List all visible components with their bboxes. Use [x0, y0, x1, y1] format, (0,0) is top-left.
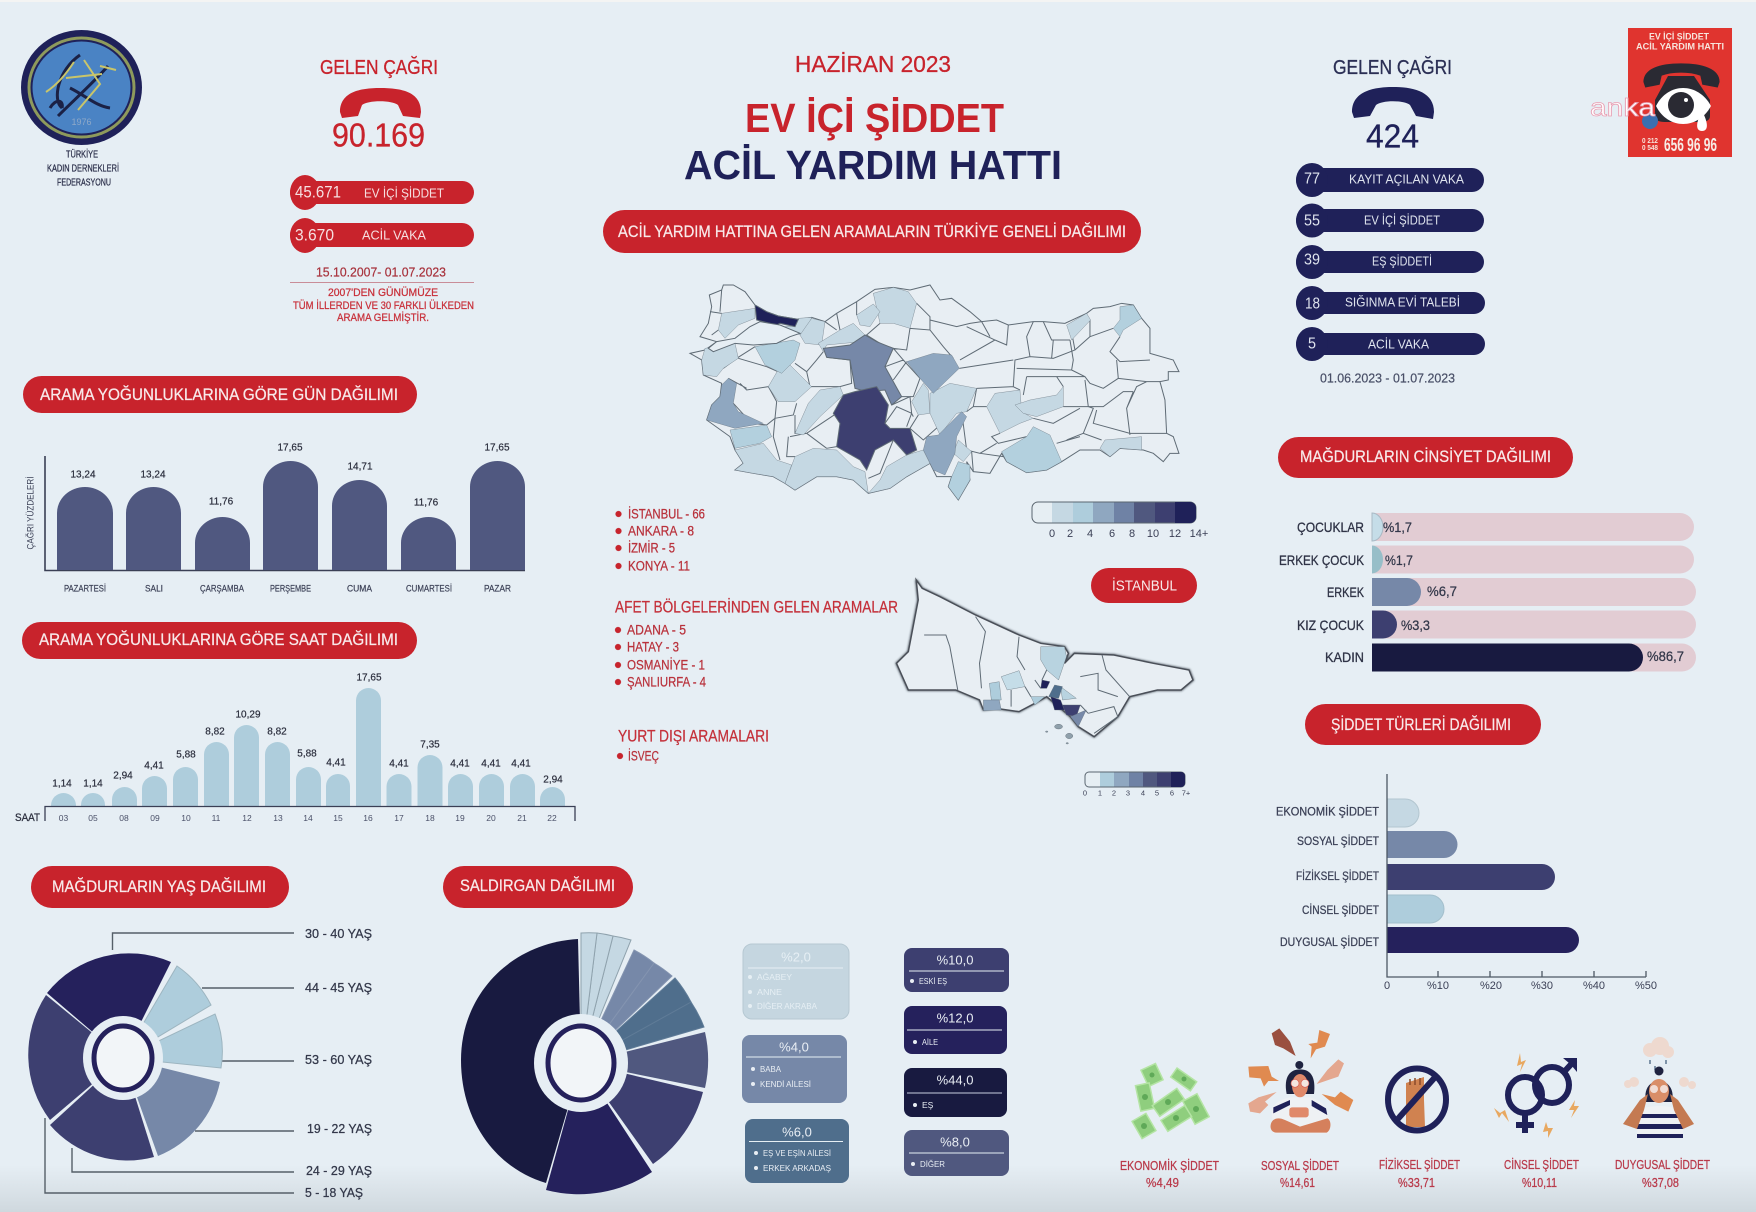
bar chart: hours: 18	[425, 813, 435, 823]
pill: sığınma evi talebi: 18	[1305, 296, 1320, 312]
pill: kayıt açılan vaka: KAYIT AÇILAN VAKA	[1349, 172, 1464, 186]
title block: EV İÇİ ŞİDDET	[745, 95, 1004, 141]
heading pill: yaş dağılımı	[31, 866, 289, 908]
map legend: Türkiye: 10	[1147, 528, 1159, 540]
pill: eş şiddeti: EŞ ŞİDDETİ	[1372, 254, 1432, 268]
bar chart: violence types	[1276, 774, 1657, 992]
bar chart: gender: %3,3	[1401, 617, 1430, 633]
bar chart: violence types: FİZİKSEL ŞİDDET	[1296, 869, 1380, 883]
bar chart: hours: 1,14	[52, 778, 72, 790]
card: %4,0: BABA	[760, 1064, 781, 1074]
bar chart: hours: 10,29	[235, 710, 261, 720]
card: %44,0: EŞ	[922, 1100, 934, 1110]
pill: acil vaka: 3.670	[295, 226, 334, 244]
icon captions row: CİNSEL ŞİDDET	[1504, 1158, 1579, 1172]
date range: 01.06.2023 - 01.07.2023	[1320, 370, 1455, 386]
bar chart: days: SALI	[145, 584, 163, 594]
card: %10,0: ESKİ EŞ	[919, 976, 947, 986]
note text: 2007'DEN GÜNÜMÜZE	[328, 287, 438, 299]
pill: ev içi şiddet: EV İÇİ ŞİDDET	[364, 186, 444, 200]
title block: ACİL YARDIM HATTI	[684, 142, 1062, 188]
choropleth map: İstanbul	[896, 580, 1193, 744]
bar chart: hours: 4,41	[389, 758, 409, 770]
bar chart: hours: 08	[119, 813, 129, 823]
heading pill: istanbul: İSTANBUL	[1112, 576, 1177, 594]
bar chart: gender	[1279, 513, 1696, 672]
bar chart: days: CUMARTESİ	[406, 584, 452, 594]
bar chart: gender: ERKEK	[1327, 584, 1365, 600]
bar chart: hours: 15	[333, 813, 343, 823]
title block	[684, 51, 1062, 188]
pill: kayıt açılan vaka: 77	[1304, 170, 1320, 188]
bar chart: days: 13,24	[70, 470, 96, 480]
poster: helpline red card	[1628, 28, 1732, 157]
bar chart: hours: 16	[363, 813, 373, 823]
heading pill: saat dağılımı	[22, 622, 417, 659]
bar chart: hours: 05	[88, 813, 98, 823]
bar chart: hours: 21	[517, 813, 527, 823]
pill: ev içi şiddet: EV İÇİ ŞİDDET	[1364, 212, 1440, 228]
icon: emotional violence figure	[1623, 1037, 1696, 1138]
map legend: Türkiye: 12	[1169, 528, 1181, 540]
icon: gender symbols	[1494, 1053, 1579, 1138]
card: %8,0	[904, 1130, 1009, 1176]
bar chart: violence types: EKONOMİK ŞİDDET	[1276, 804, 1380, 818]
heading pill: saat dağılımı: ARAMA YOĞUNLUKLARINA GÖRE SAAT DAĞILIMI	[39, 630, 398, 649]
logo: Türkiye Kadın Dernekleri Federasyonu: KADIN DERNEKLERİ	[47, 162, 119, 174]
bar chart: hours: 20	[486, 813, 496, 823]
bar chart: days: 17,65	[484, 442, 510, 454]
pill: ev içi şiddet: 55	[1304, 212, 1320, 230]
map legend: İstanbul: 3	[1126, 788, 1130, 798]
card: %6,0: %6,0	[782, 1124, 812, 1140]
bar chart: gender: ÇOCUKLAR	[1297, 519, 1364, 535]
card: %44,0: %44,0	[937, 1072, 973, 1088]
icon captions row: %4,49	[1146, 1176, 1179, 1190]
pill: eş şiddeti	[1296, 245, 1484, 279]
list: top provinces: İZMİR - 5	[628, 540, 675, 556]
bar chart: days: PAZAR	[484, 584, 511, 594]
bar chart: hours: 4,41	[326, 758, 346, 768]
leader lines and labels	[45, 927, 372, 1200]
card: %2,0	[743, 944, 849, 1019]
bar chart: hours: 17,65	[356, 672, 382, 684]
bar chart: hours: 03	[59, 813, 68, 823]
total number: 90.169	[332, 116, 425, 154]
icon captions row: %10,11	[1522, 1176, 1557, 1190]
bar chart: violence types: CİNSEL ŞİDDET	[1302, 903, 1380, 917]
bar chart: days: PERŞEMBE	[270, 584, 311, 594]
map legend: Türkiye: 8	[1129, 528, 1135, 540]
bar chart: days: 17,65	[277, 442, 303, 454]
leader lines and labels: 30 - 40 YAŞ	[305, 927, 372, 941]
bar chart: hours: 11	[212, 813, 221, 823]
bar chart: hours: 1,14	[83, 778, 103, 790]
bar chart: hours: 5,88	[297, 748, 317, 760]
bar chart: hours: 8,82	[267, 726, 287, 738]
map legend: İstanbul: 0	[1083, 788, 1087, 798]
choropleth map: Türkiye	[690, 285, 1179, 500]
bar chart: hours: 2,94	[113, 770, 133, 782]
map legend: İstanbul: 6	[1170, 788, 1174, 798]
logo: Türkiye Kadın Dernekleri Federasyonu: 1976	[71, 117, 92, 127]
date range: 15.10.2007- 01.07.2023	[316, 264, 446, 280]
card: %10,0: %10,0	[937, 952, 973, 968]
bar chart: hours: 10	[181, 813, 191, 823]
bar chart: violence types: %20	[1480, 980, 1502, 992]
bar chart: days: CUMA	[347, 584, 373, 594]
panel: monthly calls	[1296, 56, 1485, 386]
map legend: İstanbul: 7+	[1182, 788, 1191, 798]
heading pill: türkiye geneli dağılımı	[603, 210, 1141, 253]
bar chart: hours: 5,88	[176, 750, 196, 760]
card: %4,0	[742, 1035, 847, 1103]
icon captions row: FİZİKSEL ŞİDDET	[1379, 1158, 1460, 1172]
logo: Türkiye Kadın Dernekleri Federasyonu	[21, 30, 142, 188]
bar chart: gender: %1,7	[1383, 519, 1412, 535]
bar chart: hours: 4,41	[144, 760, 164, 772]
icon captions row	[1120, 1158, 1710, 1190]
map legend: Türkiye	[1032, 502, 1208, 540]
card: %6,0	[745, 1119, 849, 1183]
monthly number: 424	[1366, 118, 1419, 154]
map legend: İstanbul: 2	[1112, 788, 1116, 798]
bar chart: hours: 17	[394, 813, 404, 823]
leader lines and labels: 19 - 22 YAŞ	[307, 1122, 372, 1136]
list: afet bölgeleri: ŞANLIURFA - 4	[627, 674, 706, 690]
bar chart: hours: SAAT	[15, 812, 40, 824]
note text: ARAMA GELMİŞTİR.	[337, 311, 429, 324]
title block: HAZİRAN 2023	[795, 51, 951, 77]
list: afet bölgeleri: AFET BÖLGELERİNDEN GELEN ARAMALAR	[615, 598, 898, 616]
list: top provinces: KONYA - 11	[628, 558, 690, 574]
map legend: Türkiye: 14+	[1190, 528, 1208, 540]
note text	[293, 287, 474, 324]
bar chart: days: ÇAĞRI YÜZDELERİ	[26, 476, 36, 550]
logo: Türkiye Kadın Dernekleri Federasyonu: TÜRKİYE	[66, 148, 98, 160]
poster: helpline red card: 0 212	[1642, 138, 1658, 145]
bar chart: gender: %6,7	[1427, 583, 1457, 599]
card: %6,0: ERKEK ARKADAŞ	[763, 1163, 831, 1173]
list: afet bölgeleri	[615, 598, 898, 690]
list: yurt dışı aramaları: YURT DIŞI ARAMALARI	[618, 726, 769, 746]
bar chart: violence types: %30	[1531, 980, 1553, 992]
card: %8,0: %8,0	[940, 1134, 970, 1150]
pill: ev içi şiddet: 45.671	[295, 182, 341, 202]
icon: red phone handset	[340, 88, 421, 118]
bar chart: gender: %1,7	[1385, 552, 1413, 568]
heading pill: cinsiyet dağılımı: MAĞDURLARIN CİNSİYET DAĞILIMI	[1300, 447, 1551, 466]
note text: TÜM İLLERDEN VE 30 FARKLI ÜLKEDEN	[293, 299, 474, 312]
bar chart: violence types: SOSYAL ŞİDDET	[1297, 834, 1380, 848]
poster: helpline red card: 656 96 96	[1664, 135, 1717, 155]
heading pill: istanbul	[1091, 568, 1197, 603]
pill: kayıt açılan vaka	[1296, 163, 1484, 197]
pill: acil vaka	[290, 218, 474, 253]
map legend: Türkiye: 0	[1049, 528, 1055, 540]
map legend: İstanbul: 1	[1098, 788, 1102, 798]
bar chart: hours: 22	[547, 813, 557, 823]
bar chart: days: PAZARTESİ	[64, 584, 106, 594]
leader lines and labels: 24 - 29 YAŞ	[306, 1164, 372, 1178]
map legend: İstanbul: 4	[1141, 788, 1145, 798]
bar chart: gender: KIZ ÇOCUK	[1297, 617, 1365, 633]
list: yurt dışı aramaları: İSVEÇ	[628, 748, 659, 764]
bar chart: hours: 12	[242, 813, 252, 823]
bar chart: violence types: %10	[1427, 980, 1449, 992]
bar chart: hours: 09	[150, 813, 160, 823]
bar chart: hours: 2,94	[543, 774, 563, 786]
map legend: Türkiye: 4	[1087, 528, 1093, 540]
bar chart: hours: 8,82	[205, 726, 225, 738]
card: %2,0: %2,0	[781, 950, 811, 964]
pill: sığınma evi talebi: SIĞINMA EVİ TALEBİ	[1345, 294, 1460, 310]
bar chart: hours: 4,41	[450, 758, 470, 770]
heading pill: saldırgan dağılımı	[443, 866, 633, 908]
pill: ev içi şiddet	[290, 175, 474, 210]
list: afet bölgeleri: HATAY - 3	[627, 640, 679, 654]
heading pill: yaş dağılımı: MAĞDURLARIN YAŞ DAĞILIMI	[52, 877, 266, 896]
icon captions row: EKONOMİK ŞİDDET	[1120, 1159, 1219, 1173]
watermark: anka: anka	[1590, 94, 1655, 122]
bar chart: days: 13,24	[140, 470, 166, 480]
card: %12,0: AİLE	[922, 1037, 938, 1047]
map legend: Türkiye: 2	[1067, 528, 1073, 540]
heading pill: cinsiyet dağılımı	[1278, 437, 1573, 478]
bar chart: hours	[15, 672, 575, 832]
card: %10,0	[904, 948, 1009, 992]
pill: acil vaka: ACİL VAKA	[362, 228, 426, 242]
bar chart: hours: 4,41	[481, 758, 501, 770]
heading pill: türkiye geneli dağılımı: ACİL YARDIM HATTINA GELEN ARAMALARIN TÜRKİYE GENELİ DAĞILIMI	[618, 222, 1126, 241]
heading pill: saldırgan dağılımı: SALDIRGAN DAĞILIMI	[460, 876, 615, 895]
bar chart: violence types: DUYGUSAL ŞİDDET	[1280, 935, 1380, 949]
card: %12,0	[904, 1006, 1007, 1054]
poster: helpline red card: 0 548	[1642, 145, 1658, 152]
pill: acil vaka: ACİL VAKA	[1368, 336, 1429, 352]
card: %2,0: ANNE	[757, 987, 782, 997]
bar chart: days: ÇARŞAMBA	[200, 584, 245, 594]
map legend: Türkiye: 6	[1109, 528, 1115, 540]
card: %12,0: %12,0	[937, 1010, 973, 1026]
card: %4,0: KENDİ AİLESİ	[760, 1079, 811, 1089]
map legend: İstanbul	[1083, 772, 1191, 798]
bar chart: hours: 7,35	[420, 740, 440, 750]
panel: total calls since 2007	[290, 56, 474, 324]
list: yurt dışı aramaları	[617, 726, 769, 764]
bar chart: gender: KADIN	[1325, 649, 1364, 665]
heading: gelen çağrı red: GELEN ÇAĞRI	[320, 56, 438, 79]
bar chart: gender: ERKEK ÇOCUK	[1279, 552, 1365, 568]
list: top provinces	[616, 506, 705, 574]
bar chart: hours: 19	[455, 813, 465, 823]
list: afet bölgeleri: ADANA - 5	[627, 622, 686, 638]
icon: navy phone handset	[1352, 87, 1434, 119]
logo: Türkiye Kadın Dernekleri Federasyonu: FEDERASYONU	[57, 178, 111, 188]
card: %6,0: EŞ VE EŞİN AİLESİ	[763, 1148, 831, 1158]
pill: eş şiddeti: 39	[1304, 252, 1320, 268]
heading pill: şiddet türleri: ŞİDDET TÜRLERİ DAĞILIMI	[1331, 715, 1511, 734]
list: afet bölgeleri: OSMANİYE - 1	[627, 658, 705, 672]
bar chart: hours: 4,41	[511, 758, 531, 770]
pill: sığınma evi talebi	[1296, 286, 1485, 320]
bar chart: violence types: %40	[1583, 980, 1605, 992]
card: %4,0: %4,0	[779, 1040, 809, 1054]
heading pill: şiddet türleri	[1305, 704, 1541, 745]
heading pill: gün dağılımı	[23, 376, 417, 413]
poster: helpline red card: ACİL YARDIM HATTI	[1636, 42, 1724, 52]
icon captions row: %33,71	[1398, 1176, 1435, 1190]
bar chart: violence types: %50	[1635, 980, 1657, 992]
bar chart: days: 11,76	[209, 496, 234, 508]
pill: acil vaka: 5	[1308, 336, 1316, 352]
icon: social violence figure	[1248, 1028, 1353, 1133]
bar chart: days: 11,76	[414, 498, 439, 508]
icon captions row: %37,08	[1642, 1176, 1679, 1190]
leader lines and labels: 5 - 18 YAŞ	[305, 1186, 363, 1200]
bar chart: days	[26, 442, 525, 594]
card: %44,0	[904, 1068, 1007, 1117]
bar chart: hours: 13	[273, 813, 283, 823]
bar chart: gender: %86,7	[1647, 648, 1684, 664]
pie chart: age	[28, 927, 372, 1200]
list: top provinces: ANKARA - 8	[628, 524, 694, 538]
icon: physical violence prohibited	[1388, 1068, 1446, 1130]
poster: helpline red card: EV İÇİ ŞİDDET	[1649, 32, 1709, 42]
map legend: İstanbul: 5	[1155, 788, 1159, 798]
icon captions row: SOSYAL ŞİDDET	[1261, 1159, 1339, 1173]
icon captions row: %14,61	[1280, 1176, 1315, 1190]
heading pill: gün dağılımı: ARAMA YOĞUNLUKLARINA GÖRE GÜN DAĞILIMI	[40, 385, 398, 404]
leader lines and labels: 53 - 60 YAŞ	[305, 1053, 372, 1067]
pill: ev içi şiddet	[1296, 204, 1484, 238]
heading: gelen çağrı navy: GELEN ÇAĞRI	[1333, 56, 1452, 79]
pie chart: attackers	[461, 933, 708, 1194]
list: top provinces: İSTANBUL - 66	[628, 506, 705, 522]
bar chart: violence types: 0	[1384, 980, 1390, 992]
bar chart: hours: 14	[303, 813, 313, 823]
icon: flying money	[1132, 1063, 1209, 1139]
card: %2,0: AĞABEY	[757, 972, 792, 982]
card: %8,0: DİĞER	[920, 1159, 945, 1169]
bar chart: days: 14,71	[347, 462, 373, 472]
icon captions row: DUYGUSAL ŞİDDET	[1615, 1158, 1710, 1172]
card: %2,0: DİĞER AKRABA	[757, 1001, 817, 1011]
leader lines and labels: 44 - 45 YAŞ	[305, 981, 372, 995]
pill: acil vaka	[1296, 327, 1485, 361]
